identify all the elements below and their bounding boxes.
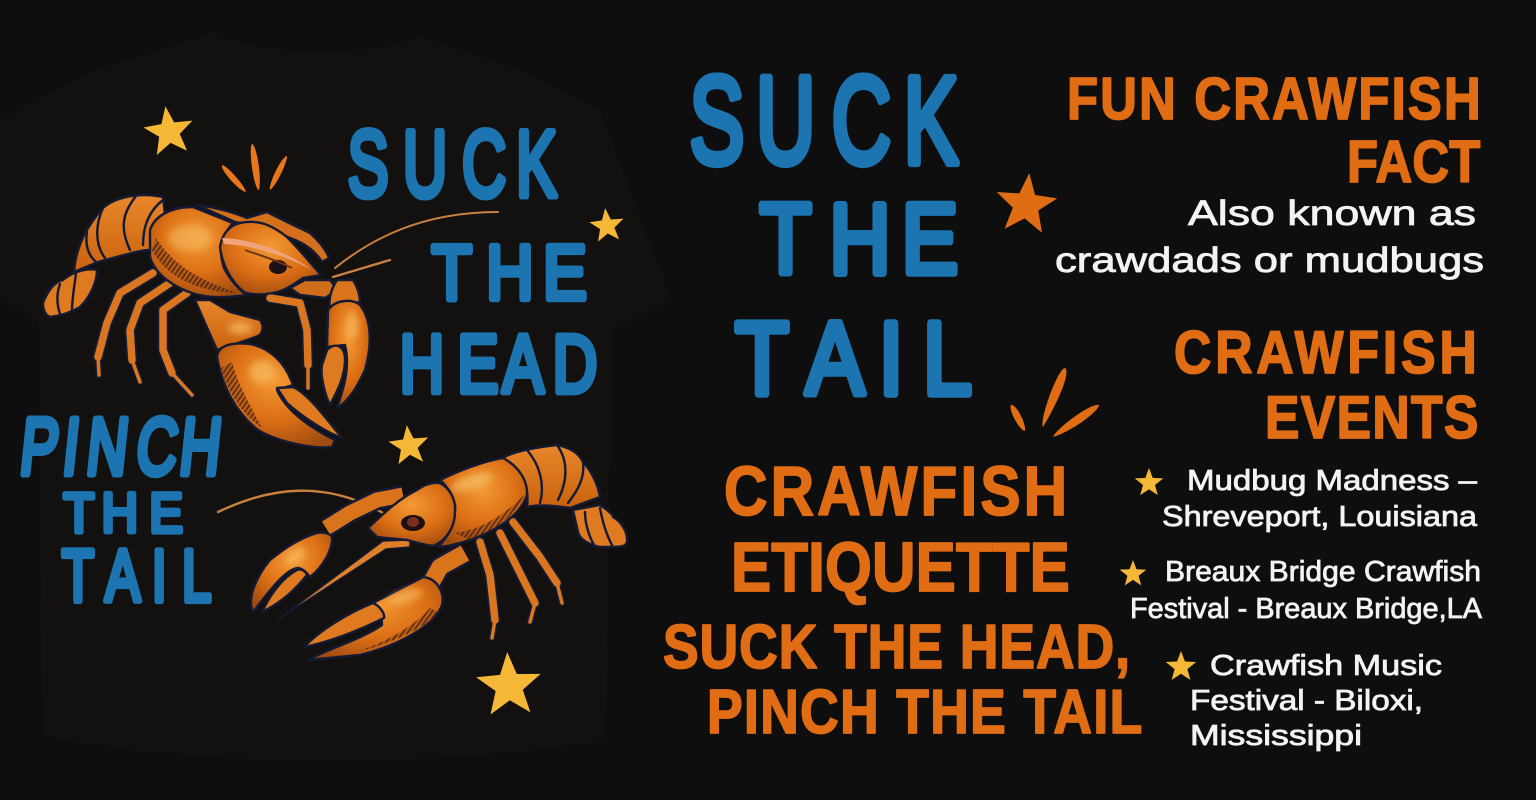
word: TAIL: TAIL [735, 301, 972, 417]
heading line: fact: FACT [1347, 128, 1481, 195]
word: THE: THE [760, 185, 958, 295]
line: SUCK THE HEAD,: SUCK THE HEAD, [663, 613, 1130, 682]
event: mudbug madness [1162, 465, 1478, 533]
lower large claw arm [195, 300, 262, 350]
left slogan: suck the head [348, 111, 597, 410]
heading: crawfish: CRAWFISH [1174, 318, 1477, 386]
palm shading [221, 362, 262, 428]
burst marks: right [1011, 368, 1099, 437]
word: THE: THE [432, 230, 587, 316]
event: crawfish music: Festival - Biloxi, [1190, 685, 1423, 717]
crawfish illustration: lower [218, 445, 627, 660]
head [220, 222, 321, 294]
event: crawfish music: Mississippi [1190, 720, 1362, 752]
line: ETIQUETTE: ETIQUETTE [731, 528, 1070, 606]
event: crawfish music: Crawfish Music [1210, 650, 1442, 682]
word: SUCK: SUCK [690, 52, 958, 190]
center slogan: suck the tail [690, 52, 972, 417]
burst marks: left [222, 144, 287, 192]
lower claw arm [430, 553, 465, 585]
long thin limb [277, 540, 410, 620]
event: mudbug madness: Shreveport, Louisiana [1162, 501, 1478, 533]
word: TAIL: TAIL [62, 536, 211, 617]
carapace highlight [168, 225, 212, 251]
mouthparts [290, 280, 338, 298]
carapace shading [455, 495, 524, 540]
lower claw palm [308, 577, 443, 660]
event: breaux bridge [1130, 556, 1483, 625]
eye highlight [407, 517, 419, 527]
word: PINCH: PINCH [16, 401, 226, 491]
upper claw arm [326, 495, 403, 528]
text: also known as: Also known as [1188, 194, 1476, 233]
heading: events: EVENTS [1265, 383, 1478, 451]
lower large claw finger [277, 387, 342, 438]
line: PINCH THE TAIL: PINCH THE TAIL [707, 678, 1142, 747]
carapace shading [152, 238, 238, 293]
carapace [150, 207, 246, 297]
text: crawdads or mudbugs: crawdads or mudbugs [1055, 241, 1484, 280]
palm shading [360, 608, 438, 651]
right claw finger [322, 346, 345, 405]
upper claw finger [262, 569, 307, 612]
star icons [141, 103, 1196, 715]
event: breaux bridge: Breaux Bridge Crawfish [1165, 556, 1481, 588]
line: CRAWFISH: CRAWFISH [724, 452, 1067, 530]
abdomen [503, 445, 600, 508]
abdomen [74, 195, 165, 272]
upper claw limb behind head [197, 205, 329, 262]
word: SUCK: SUCK [348, 111, 557, 216]
antenna [218, 491, 383, 513]
heading: fun crawfish fact: FUN CRAWFISH [1067, 65, 1481, 132]
event: crawfish music [1190, 650, 1442, 752]
lower large claw palm [217, 343, 335, 447]
right claw arm [329, 280, 360, 308]
heading: crawfish etiquette [663, 452, 1142, 747]
carapace [438, 458, 527, 547]
eye [401, 515, 425, 531]
fun fact panel [1055, 65, 1484, 280]
tail fan [573, 505, 627, 547]
crawfish illustration: upper [43, 195, 498, 447]
left slogan: pinch the tail [16, 401, 226, 617]
t-shirt silhouette [0, 32, 672, 760]
word: HEAD: HEAD [400, 318, 597, 410]
upper claw palm [251, 533, 332, 612]
head [368, 483, 455, 546]
tail fan [43, 269, 97, 317]
icon: orange star [993, 170, 1060, 234]
word: THE: THE [63, 483, 183, 545]
event: mudbug madness: Mudbug Madness – [1187, 465, 1478, 497]
lower claw finger [304, 603, 384, 647]
antennae [335, 212, 498, 268]
event: breaux bridge: Festival - Breaux Bridge,LA [1130, 593, 1483, 625]
events panel [1130, 318, 1483, 752]
eye [269, 260, 287, 274]
right claw palm [327, 301, 370, 408]
